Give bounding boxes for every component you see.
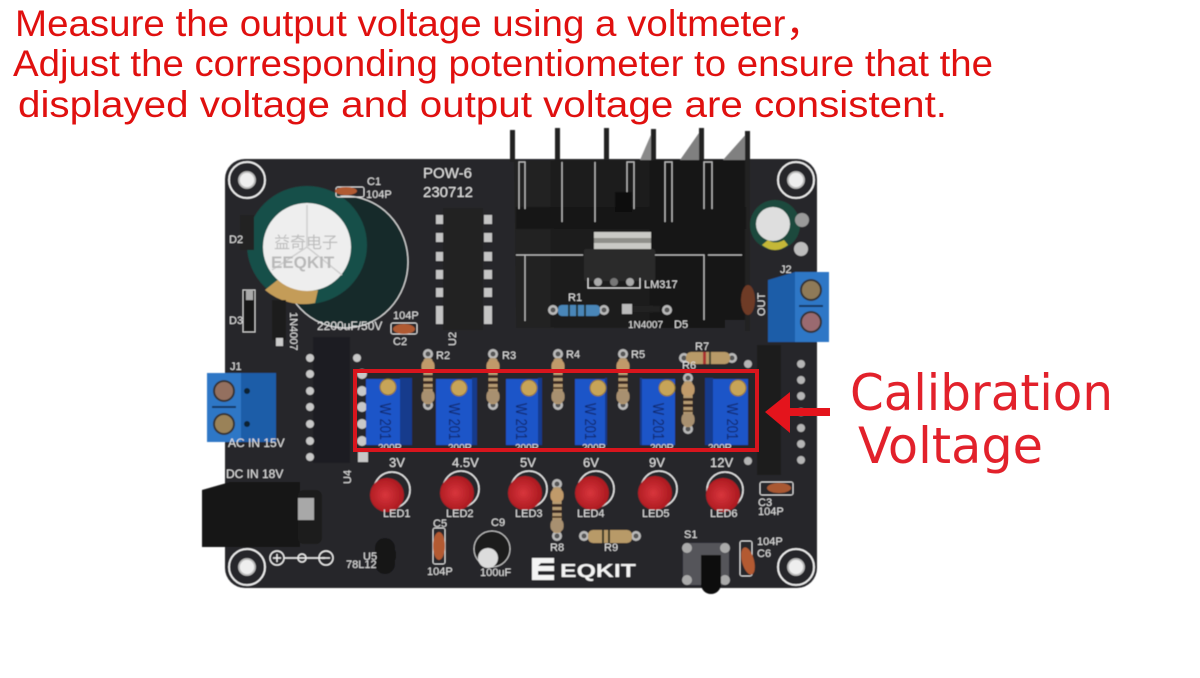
resistors [422, 304, 737, 543]
silkscreen labels: R6 [682, 360, 696, 372]
board [225, 159, 817, 588]
silkscreen labels: 1N4007 [628, 320, 663, 331]
silkscreen labels: 104P [366, 189, 392, 201]
silkscreen labels: 104P [427, 566, 453, 578]
potentiometers: W 201 [649, 403, 666, 440]
silkscreen labels [226, 165, 792, 579]
silkscreen labels: C3 [758, 497, 772, 509]
silkscreen labels: R7 [695, 341, 709, 353]
arrow: pointing to calibration row [765, 392, 830, 433]
callout box: trimmer row highlight [355, 371, 757, 450]
silkscreen labels: C9 [491, 517, 505, 529]
silkscreen labels: 104P [757, 536, 783, 548]
silkscreen labels: R4 [566, 349, 580, 361]
large capacitor: EEQKIT [271, 253, 335, 272]
silkscreen labels: 1N4007 [287, 312, 299, 351]
silkscreen labels: LED4 [577, 508, 605, 520]
silkscreen labels: U4 [342, 470, 354, 484]
silkscreen labels: 6V [583, 455, 599, 470]
IC U4 [306, 337, 368, 463]
potentiometers: W 201 [445, 403, 462, 440]
silkscreen labels: 100uF [480, 567, 511, 579]
silkscreen labels: U2 [447, 332, 459, 346]
silkscreen labels: 200R [582, 443, 606, 454]
silkscreen labels: 200R [515, 443, 539, 454]
silkscreen labels: 200R [448, 443, 472, 454]
heading: measurement instructions: Measure the output voltage using a voltmeter， [15, 3, 824, 44]
LEDs [370, 471, 743, 512]
silkscreen labels: 230712 [423, 184, 473, 201]
silkscreen labels: DC IN 18V [226, 467, 283, 481]
capacitor C9 [474, 531, 510, 568]
silkscreen labels: AC IN 15V [228, 436, 285, 450]
silkscreen labels: POW-6 [423, 165, 472, 182]
heading: measurement instructions: Adjust the corresponding potentiometer to ensure that the [13, 43, 993, 84]
potentiometers: W 201 [723, 403, 740, 440]
silkscreen labels: LED2 [446, 508, 474, 520]
silkscreen labels: R3 [502, 350, 516, 362]
silkscreen labels: LED5 [642, 508, 670, 520]
silkscreen labels: 104P [393, 310, 419, 322]
silkscreen labels: R2 [436, 350, 450, 362]
silkscreen labels: 12V [710, 455, 733, 470]
silkscreen labels: S1 [684, 529, 697, 541]
silkscreen labels: J1 [230, 361, 242, 373]
potentiometers [366, 378, 748, 445]
small capacitor top right [750, 200, 809, 256]
logo: EQKIT: EQKIT [560, 561, 636, 581]
silkscreen labels: C5 [433, 518, 447, 530]
silkscreen labels: 2200uF/50V [317, 319, 382, 333]
silkscreen labels: R5 [631, 349, 645, 361]
silkscreen labels: R9 [604, 542, 618, 554]
panel: circuit board photo [202, 128, 829, 594]
silkscreen labels: D2 [229, 234, 243, 246]
silkscreen labels: 4.5V [452, 455, 479, 470]
silkscreen labels: C2 [393, 336, 407, 348]
IC socket U2 [436, 208, 492, 330]
logo: EQKIT [532, 558, 636, 581]
callout text: Calibration Voltage [850, 364, 1113, 475]
terminal block J1 [207, 373, 276, 442]
silkscreen labels: C1 [367, 176, 381, 188]
regulator LM317: LM317 [644, 279, 678, 291]
silkscreen labels: J2 [780, 264, 792, 276]
callout text: Calibration Voltage: Voltage [858, 417, 1043, 475]
push button S1 [682, 543, 730, 594]
heading: measurement instructions: displayed voltage and output voltage are consistent. [18, 84, 947, 125]
heatsink body [514, 160, 746, 328]
regulator LM317 [584, 232, 678, 291]
silkscreen labels: LED1 [383, 508, 411, 520]
callout text: Calibration Voltage: Calibration [850, 364, 1113, 422]
silkscreen labels: OUT [756, 292, 768, 316]
mounting holes [229, 162, 814, 585]
large capacitor: 益奇电子 [274, 234, 338, 252]
large capacitor [247, 186, 408, 328]
silkscreen labels: U5 [363, 551, 377, 563]
small capacitors [335, 187, 793, 576]
silkscreen labels: 78L12 [346, 559, 377, 571]
potentiometers: W 201 [376, 403, 393, 440]
silkscreen labels: LED6 [710, 508, 738, 520]
silkscreen labels: 104P [758, 506, 784, 518]
regulator U5 [375, 538, 396, 574]
potentiometers: W 201 [512, 403, 529, 440]
silkscreen labels: R8 [550, 542, 564, 554]
silkscreen labels: 200R [708, 443, 732, 454]
silkscreen labels: LED3 [515, 508, 543, 520]
silkscreen labels: C6 [757, 548, 771, 560]
silkscreen labels: R1 [568, 292, 582, 304]
heatsink fins [510, 128, 750, 331]
silkscreen labels: D3 [229, 315, 243, 327]
silkscreen labels: 200R [378, 443, 402, 454]
silkscreen labels: 9V [649, 455, 665, 470]
silkscreen labels: D5 [674, 319, 688, 331]
silkscreen labels: 200R [650, 443, 674, 454]
silkscreen labels: 5V [520, 455, 536, 470]
heading: measurement instructions [13, 3, 993, 125]
potentiometers: W 201 [581, 403, 598, 440]
diodes D2 D3 [240, 215, 286, 346]
terminal block J2 [768, 272, 829, 342]
polarity symbol [270, 551, 333, 565]
IC U3 [744, 345, 805, 475]
silkscreen labels: 3V [389, 455, 405, 470]
DC jack [202, 482, 322, 547]
